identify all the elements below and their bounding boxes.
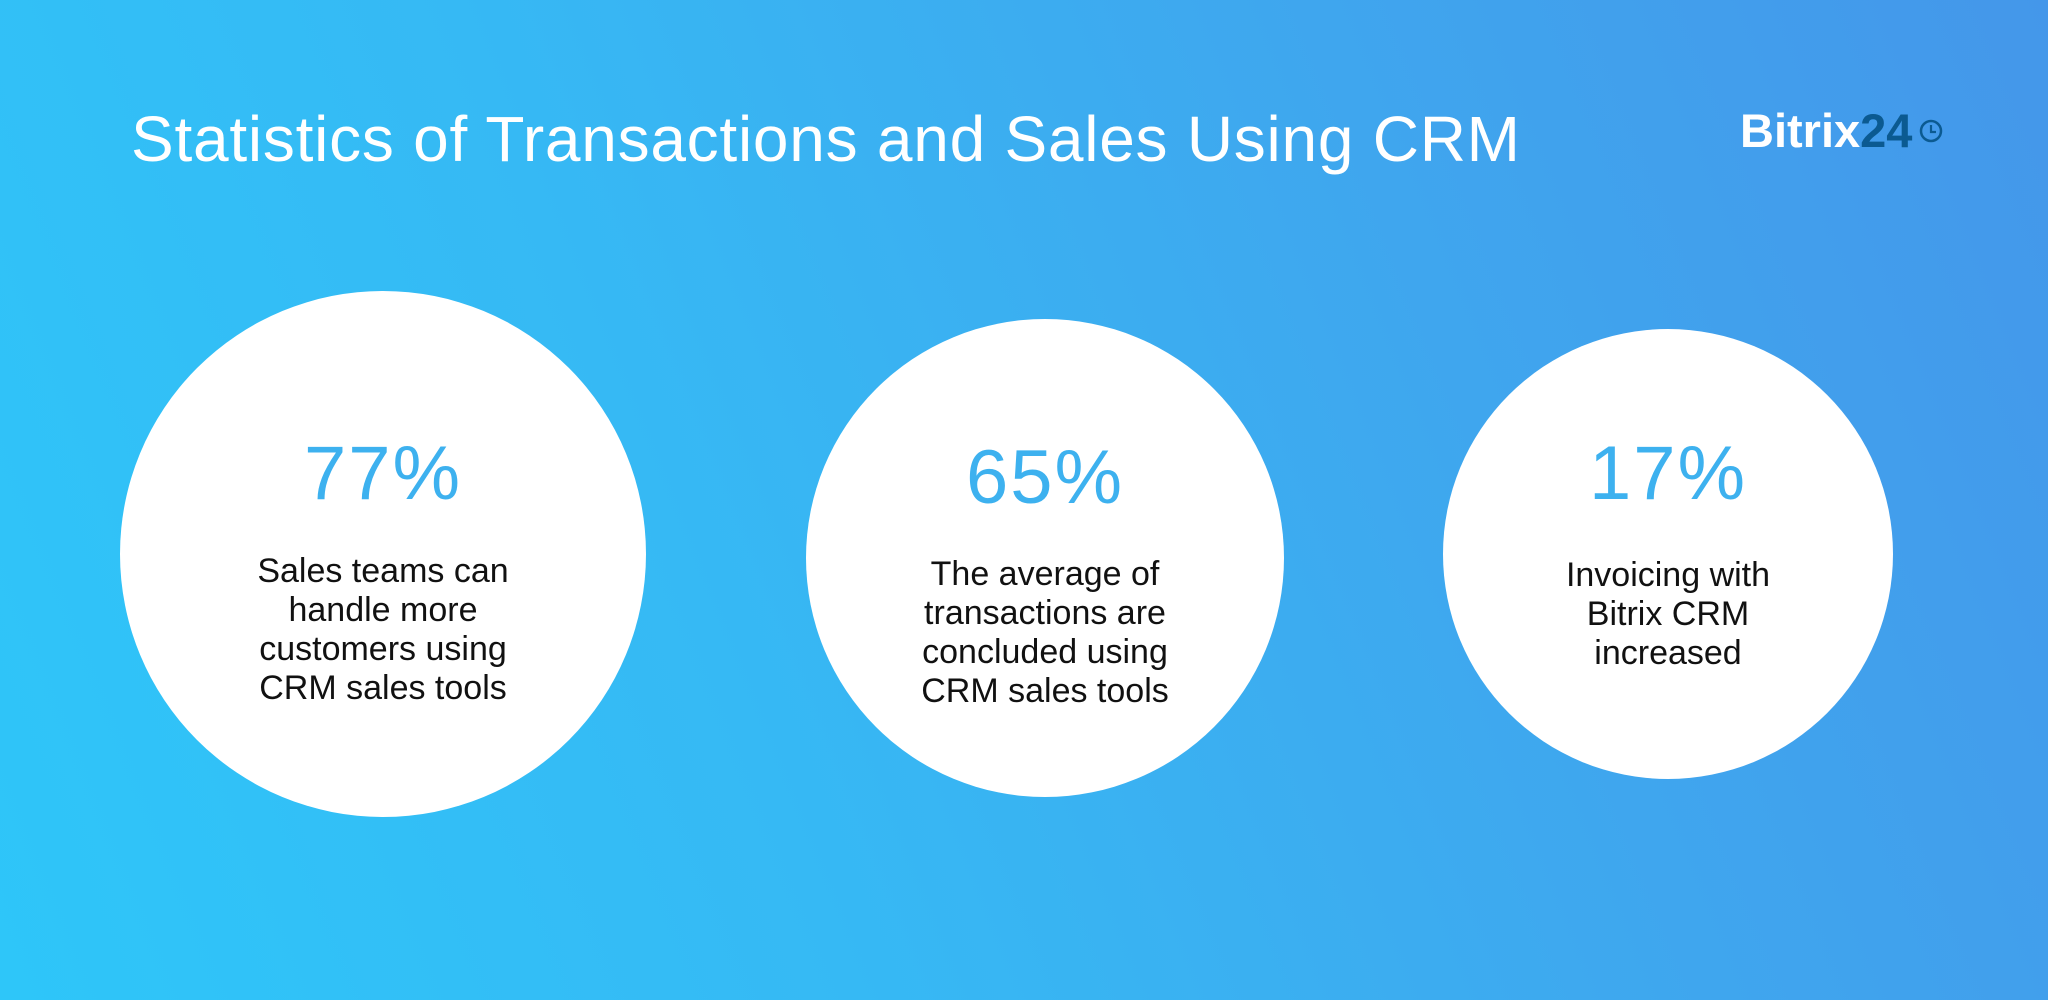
text block: The average of: [931, 555, 1159, 593]
panel: circle 77%: [120, 291, 646, 817]
text block: transactions are: [924, 594, 1166, 632]
icon: clock: [1920, 120, 1942, 142]
text block: concluded using: [922, 633, 1168, 671]
text block: handle more: [288, 591, 478, 629]
text block: [1566, 556, 1770, 672]
text block: [257, 552, 509, 707]
text block: Bitrix CRM: [1587, 595, 1749, 633]
stat: 65%: 65%: [966, 435, 1124, 520]
stat: 77%: 77%: [304, 431, 462, 516]
text block: increased: [1594, 634, 1742, 672]
text block: Sales teams can: [257, 552, 509, 590]
text block: CRM sales tools: [921, 672, 1169, 710]
stat: 17%: 17%: [1589, 431, 1747, 516]
text block: customers using: [259, 630, 507, 668]
text block: CRM sales tools: [259, 669, 507, 707]
panel: circle 65%: [806, 319, 1284, 797]
text block: [921, 555, 1169, 710]
panel: circle 17%: [1443, 329, 1893, 779]
title: Statistics of Transactions and Sales Using CRM: [131, 103, 1521, 175]
logo: Bitrix24: Bitrix24: [1740, 104, 1912, 157]
text block: Invoicing with: [1566, 556, 1770, 594]
